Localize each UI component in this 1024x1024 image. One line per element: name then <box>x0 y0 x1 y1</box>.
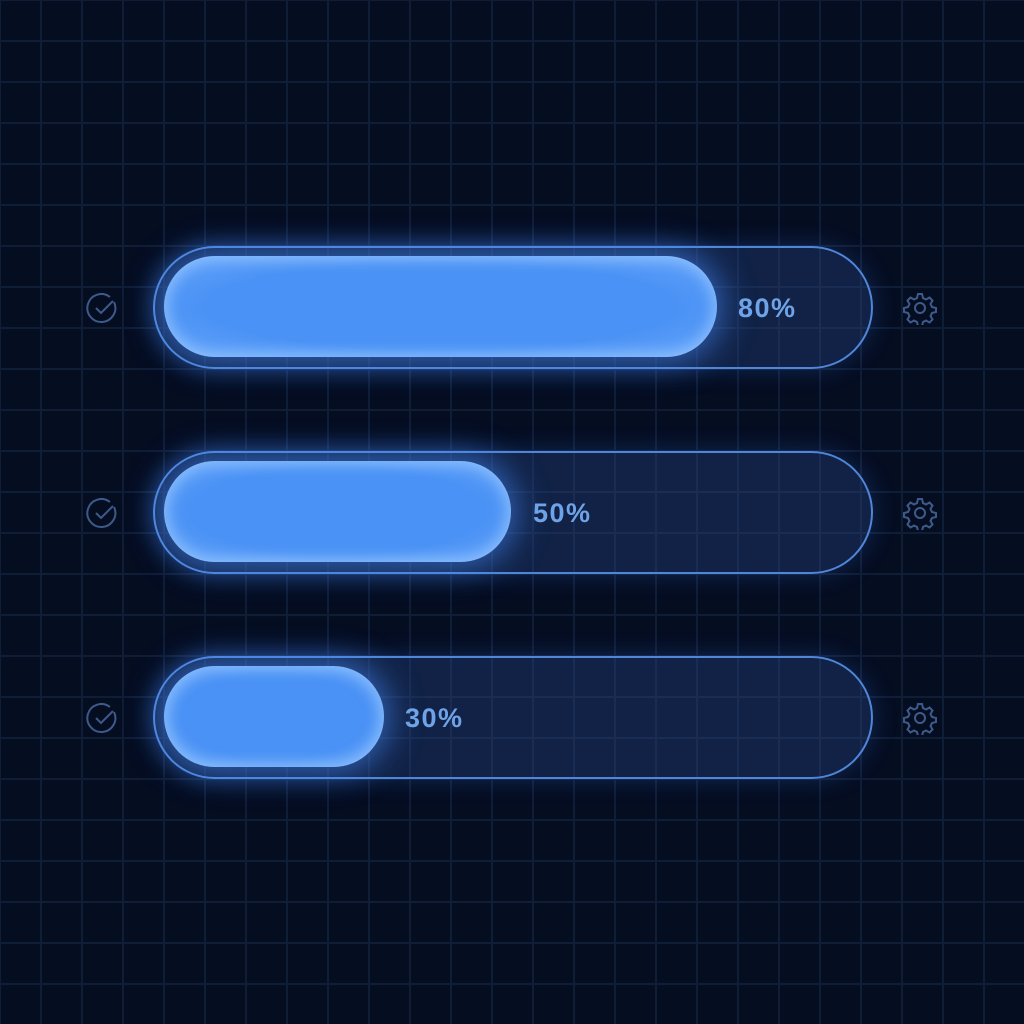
icon: check 3 <box>86 702 116 733</box>
track 1 <box>153 246 873 369</box>
track 3 <box>153 656 873 779</box>
bar 2: 50% <box>86 432 937 592</box>
label 80%: 80% <box>738 293 797 323</box>
fill 2 <box>164 461 511 562</box>
bar 1: 80% <box>86 226 937 387</box>
track 2 <box>153 451 873 574</box>
bar 3: 30% <box>86 636 937 797</box>
icon: check 1 <box>86 292 116 323</box>
icon: gear 2 <box>903 498 937 530</box>
label 50%: 50% <box>533 498 592 528</box>
icon: check 2 <box>86 498 116 528</box>
fill 3 <box>164 666 384 767</box>
label 30%: 30% <box>405 703 464 733</box>
fill 1 <box>164 256 717 357</box>
icon: gear 3 <box>903 703 937 735</box>
icon: gear 1 <box>903 293 937 325</box>
